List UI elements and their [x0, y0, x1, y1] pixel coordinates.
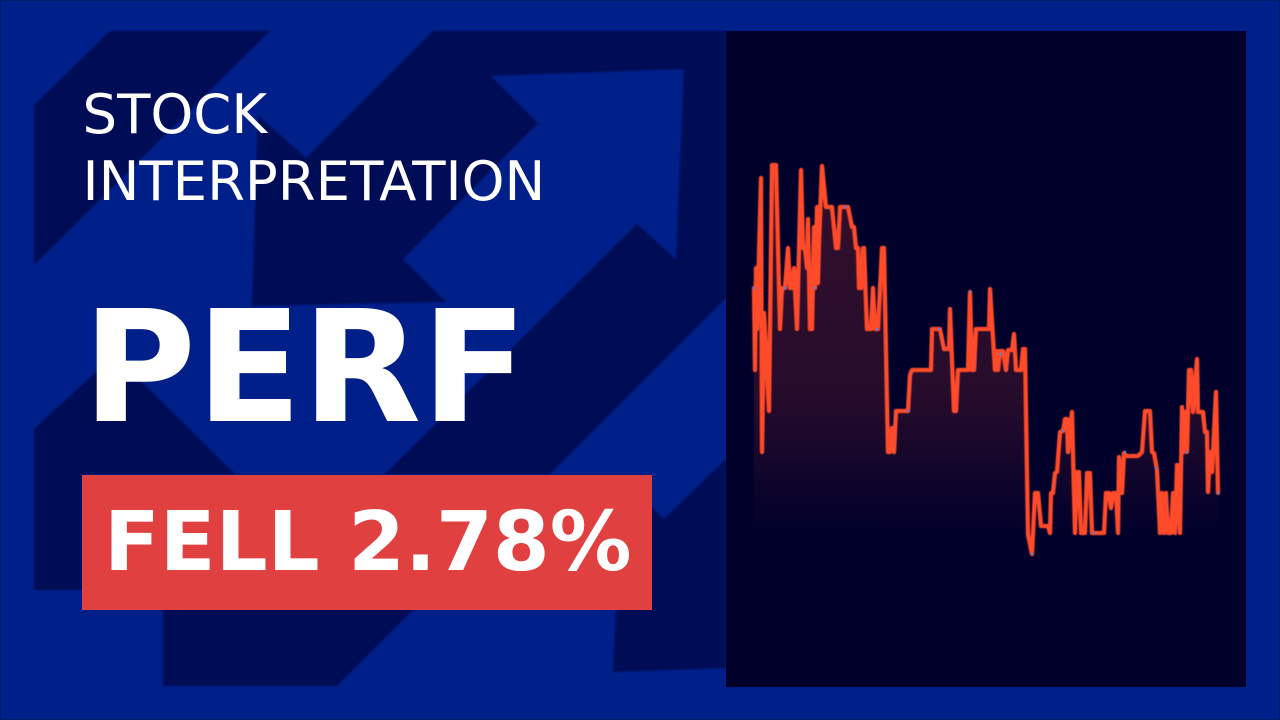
ticker: PERF: PERF	[82, 277, 527, 458]
heading: stock interpretation: STOCK	[82, 82, 268, 146]
heading: stock interpretation	[82, 82, 545, 213]
change badge	[82, 475, 652, 610]
chart panel	[726, 31, 1246, 687]
background arrows pattern	[34, 31, 726, 686]
price line	[754, 165, 1218, 554]
area under price line	[754, 165, 1218, 560]
heading: stock interpretation: INTERPRETATION	[82, 149, 545, 213]
change value: FELL 2.78%	[104, 495, 632, 590]
data point markers	[753, 206, 1219, 555]
